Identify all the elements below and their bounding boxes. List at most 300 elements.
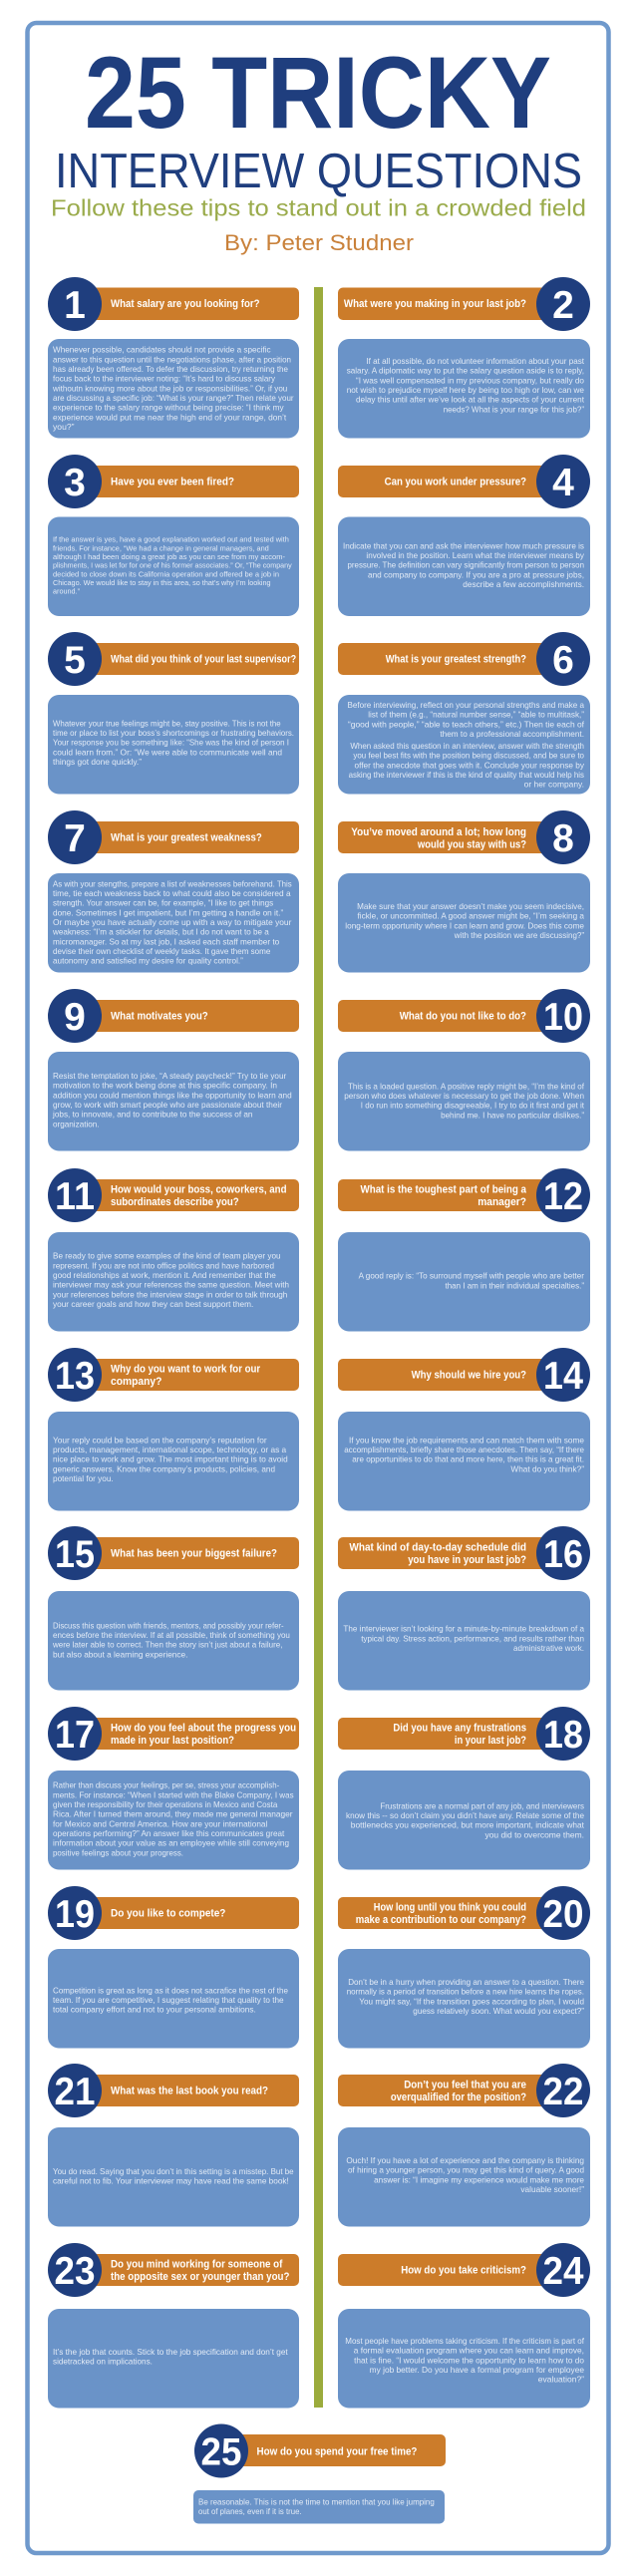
answer panel 13 (48, 1412, 299, 1511)
header bar 4 (338, 466, 563, 497)
title: 25 tricky: 25 TRICKY (85, 36, 551, 150)
question 23 (48, 2243, 299, 2409)
answer text 10: behind me. I have no particular dislikes.” (441, 1110, 584, 1120)
header bar 14 (338, 1359, 563, 1391)
answer panel 19 (48, 1949, 299, 2048)
header bar 16 (338, 1537, 563, 1569)
number badge 11: 11 (55, 1175, 95, 1218)
question text 9: What motivates you? (111, 1011, 208, 1023)
answer text 16 (343, 1624, 584, 1653)
number badge 2 (536, 277, 590, 331)
answer text 22: of hiring a younger person, you may get this kind of query. A good (348, 2165, 584, 2175)
question 1 (48, 277, 299, 439)
answer text 23: sidetracked on implications. (53, 2357, 153, 2367)
question 16 (338, 1526, 590, 1691)
answer text 14 (344, 1435, 584, 1473)
answer text 9: motivation to the work being done at this specific company. In (53, 1081, 277, 1091)
answer text 16: administrative work. (513, 1643, 584, 1653)
header bar 5 (75, 643, 299, 675)
answer text 6: list of them (e.g., “natural number sense,” “able to multitask,” (368, 710, 584, 720)
question text 4: Can you work under pressure? (385, 477, 526, 488)
question text 8: would you stay with us? (417, 838, 526, 850)
number badge 10 (536, 989, 590, 1043)
answer text 16: typical day. Stress action, performance, and results rather than (361, 1633, 584, 1643)
answer text 4: describe a few accomplishments. (463, 579, 584, 589)
answer text 24: that is fine. “I would welcome the opportunity to learn how to do (354, 2355, 584, 2365)
answer text 2: salary. A diplomatic way to put the salary question aside is to reply, (347, 366, 584, 376)
number badge 2: 2 (552, 284, 574, 327)
answer panel 24 (338, 2309, 590, 2409)
answer panel 8 (338, 873, 590, 973)
answer text 15: Discuss this question with friends, mentors, and possibly your refer- (53, 1620, 284, 1630)
answer text 1: Whenever possible, candidates should not provide a specific (53, 345, 271, 355)
question text 20 (356, 1902, 526, 1926)
number badge 4 (536, 455, 590, 508)
answer text 3: Chicago. We would like to stay in this area, so that’s why I’m looking (53, 578, 271, 587)
header bar 25 (221, 2434, 446, 2466)
answer text 7: autonomy and satisfied my desire for quality control.” (53, 956, 243, 966)
question text 25: How do you spend your free time? (257, 2446, 418, 2458)
number badge 20: 20 (542, 1893, 584, 1936)
answer text 23: It’s the job that counts. Stick to the job specification and don’t get (53, 2347, 288, 2357)
number badge 3: 3 (64, 462, 86, 504)
question 25 (193, 2424, 446, 2524)
answer text 5: Whatever your true feelings might be, stay positive. This is not the (53, 718, 281, 728)
answer text 21: careful not to fib. Your interviewer may have read the same book! (53, 2176, 289, 2186)
answer text 4: involved in the position. Learn what the interviewer means by (366, 550, 585, 560)
question text 20: How long until you think you could (374, 1902, 526, 1914)
answer text 12: than I am in their individual specialties.” (445, 1280, 584, 1290)
question text 14: Why should we hire you? (412, 1370, 526, 1382)
answer text 1: focus back to the interviewer noting: “It’s hard to discuss salary (53, 374, 276, 384)
answer text 24 (345, 2336, 585, 2385)
question text 8 (351, 826, 526, 850)
answer panel 7 (48, 873, 299, 973)
number badge 16 (536, 1526, 590, 1580)
header bar 15 (75, 1537, 299, 1569)
answer text 24: evaluation?” (538, 2375, 584, 2385)
header bar 1 (75, 287, 299, 320)
number badge 5: 5 (64, 639, 86, 682)
header bar 19 (75, 1897, 299, 1929)
number badge 10: 10 (543, 996, 583, 1039)
answer text 21: You do read. Saying that you don’t in this setting is a misstep. But be (53, 2166, 294, 2176)
number badge 25: 25 (201, 2430, 241, 2474)
header bar 24 (338, 2254, 563, 2286)
question text 11 (111, 1184, 287, 1208)
answer text 18 (346, 1800, 585, 1839)
number badge 17: 17 (55, 1714, 95, 1757)
question text 15: What has been your biggest failure? (111, 1548, 277, 1560)
answer text 24: my job better. Do you have a formal program for employee (370, 2365, 584, 2375)
answer text 14: are opportunities to do that and more here, then this is a great fit. (352, 1454, 584, 1464)
answer text 3 (53, 535, 292, 596)
answer text 10: This is a loaded question. A positive reply might be, “I’m the kind of (348, 1081, 585, 1091)
answer text 20: guess relatively soon. What would you expect?” (413, 2006, 584, 2016)
answer panel 18 (338, 1771, 590, 1870)
answer panel 17 (48, 1771, 299, 1870)
answer text 8: long-term opportunity where I can learn and grow. Does this come (345, 920, 584, 930)
answer panel 20 (338, 1949, 590, 2048)
number badge 20 (536, 1886, 590, 1940)
answer text 20: normally is a period of transition before a new hire learns the ropes. (347, 1987, 584, 1997)
question 12 (338, 1168, 590, 1332)
answer text 18: know this -- so don’t claim you didn’t have any. Relate some of the (346, 1810, 584, 1820)
answer text 10: person who does whatever is necessary to get the job done. When (344, 1091, 584, 1101)
number badge 6: 6 (552, 639, 574, 682)
number badge 23 (48, 2243, 102, 2297)
number badge 5 (48, 632, 102, 686)
answer panel 16 (338, 1591, 590, 1691)
question text 18: Did you have any frustrations (393, 1723, 526, 1735)
header bar 2 (338, 287, 563, 320)
answer text 15: but also about a learning experience. (53, 1649, 187, 1659)
question 14 (338, 1348, 590, 1511)
number badge 14 (536, 1348, 590, 1402)
answer text 2: If at all possible, do not volunteer information about your past (366, 356, 585, 366)
answer text 17: Rica. After I turned them around, they made me general manager (53, 1809, 293, 1819)
answer text 5: Your response you be something like: “She was the kind of person I (53, 738, 289, 748)
answer text 11: good relationships at work, mention it. And remember that the (53, 1270, 276, 1280)
question text 22: overqualified for the position? (391, 2092, 526, 2103)
number badge 9 (48, 989, 102, 1043)
answer text 15: were later able to correct. Then the story isn’t just about a failure, (52, 1640, 283, 1650)
answer text 6: When asked this question in an interview, answer with the strength (350, 741, 584, 751)
answer text 14: accomplishments, briefly share those anecdotes. Then say, “If there (344, 1445, 584, 1454)
number badge 1: 1 (64, 284, 86, 327)
answer text 7 (52, 878, 292, 966)
answer text 1: withoutn knowing more about the job or responsibilities.” Or, if you (52, 383, 288, 393)
answer text 22: answer is: “I imagine my experience would make me more (374, 2174, 584, 2184)
number badge 1 (48, 277, 102, 331)
answer text 19 (53, 1985, 288, 2015)
question text 11: subordinates describe you? (111, 1196, 239, 1208)
answer panel 10 (338, 1052, 590, 1150)
question text 19: Do you like to compete? (111, 1908, 226, 1920)
answer text 4: Indicate that you can and ask the interviewer how much pressure is (343, 540, 584, 550)
header bar 23 (75, 2254, 299, 2286)
question text 11: How would your boss, coworkers, and (111, 1184, 287, 1196)
header bar 11 (75, 1179, 299, 1211)
question 2 (338, 277, 590, 439)
answer text 17 (53, 1780, 294, 1857)
answer text 1: experience would put me near the high end of your range, don’t (53, 412, 287, 422)
number badge 7: 7 (64, 817, 86, 860)
answer text 1 (52, 345, 294, 432)
question text 5: What did you think of your last supervisor? (111, 654, 296, 666)
answer text 21 (53, 2166, 294, 2186)
answer text 12 (359, 1271, 584, 1290)
answer panel 1 (48, 339, 299, 439)
answer text 11 (53, 1251, 289, 1309)
answer text 23 (53, 2347, 288, 2367)
answer text 1: has already been offered. To defer the discussion, try returning the (53, 364, 288, 374)
question 21 (48, 2064, 299, 2227)
answer text 6: Before interviewing, reflect on your personal strengths and make a (347, 700, 584, 710)
question text 12 (361, 1184, 527, 1208)
number badge 8: 8 (552, 817, 574, 860)
question text 17 (111, 1723, 296, 1747)
question text 17: made in your last position? (111, 1735, 234, 1747)
answer text 19: team. If you are competitive, I suggest relating that quality to the (53, 1995, 284, 2005)
number badge 11 (48, 1168, 102, 1222)
question text 20: make a contribution to our company? (356, 1914, 526, 1926)
answer text 8: fickle, or uncommitted. A good answer might be, “I’m seeking a (357, 911, 584, 921)
question 13 (48, 1348, 299, 1511)
number badge 12 (536, 1168, 590, 1222)
answer text 10: I do run into something disagreeable, I try to do it first and get it (361, 1101, 585, 1111)
answer text 3: although I had been doing a great job as you can see from my accom- (53, 552, 286, 561)
answer text 18: bottlenecks you experienced, but more important, indicate what (351, 1820, 585, 1830)
number badge 22: 22 (542, 2071, 584, 2113)
answer text 4 (343, 540, 585, 589)
number badge 24: 24 (542, 2250, 584, 2293)
answer text 3: If the answer is yes, have a good explanation worked out and tested with (53, 535, 289, 544)
number badge 23: 23 (54, 2250, 96, 2293)
question 9 (48, 989, 299, 1150)
answer text 5 (53, 718, 294, 767)
answer text 13: Your reply could be based on the company’s reputation for (53, 1435, 267, 1445)
answer text 6: asking the interviewer if this is the kind of quality that would help his (349, 770, 584, 780)
answer text 7: devise their own checklist of weekly tasks. It gave them some (53, 946, 271, 956)
answer text 14: What do you think?” (510, 1463, 584, 1473)
question text 8: You’ve moved around a lot; how long (351, 826, 526, 838)
answer text 3: friends. For instance, “We had a change in general managers, and (53, 543, 269, 552)
answer text 6: you feel best fits with the position being discussed, and be sure to (353, 751, 584, 761)
question 24 (338, 2243, 590, 2409)
header bar 12 (338, 1179, 563, 1211)
number badge 25 (194, 2424, 248, 2478)
answer text 22 (346, 2155, 584, 2194)
question text 24: How do you take criticism? (401, 2265, 526, 2277)
question text 16 (349, 1541, 526, 1566)
question 3 (48, 455, 299, 616)
number badge 15 (48, 1526, 102, 1580)
number badge 16: 16 (543, 1533, 583, 1576)
answer text 8 (345, 901, 584, 940)
answer text 16: The interviewer isn’t looking for a minute-by-minute breakdown of a (343, 1624, 584, 1634)
answer panel 21 (48, 2127, 299, 2227)
answer text 1: are discussing a specific job: “What is your range?” Then relate your (53, 393, 294, 403)
answer panel 15 (48, 1591, 299, 1691)
answer text 5: things got done quickly.” (53, 757, 142, 767)
answer text 25: out of planes, even if it is true. (198, 2506, 302, 2516)
answer text 7: As with your stengths, prepare a list of weaknesses beforehand. This (53, 878, 292, 888)
header bar 9 (75, 1000, 299, 1032)
answer text 9: addition you could mention things like the opportunity to learn and (53, 1090, 292, 1100)
header (51, 36, 586, 255)
answer text 11: interviewer may ask your references the same question. Meet with (53, 1280, 289, 1290)
answer text 2 (347, 356, 585, 414)
header bar 6 (338, 643, 563, 675)
question 10 (338, 989, 590, 1150)
answer text 2: delay this until after we’ve look at all the aspects of your current (356, 395, 585, 405)
question text 18: in your last job? (455, 1735, 526, 1747)
answer text 17: ments. For instance: “When I started with the Blake Company, I was (53, 1789, 294, 1799)
answer text 9: jobs, to innovate, and to contribute to the success of an (52, 1110, 253, 1120)
number badge 17 (48, 1707, 102, 1761)
answer text 5: could learn from.” Or: “We were able to communicate well and (53, 747, 282, 757)
center divider line (314, 287, 323, 2408)
answer text 24: a formal evaluation program where you can learn and improve, (354, 2346, 584, 2356)
question text 12: What is the toughest part of being a (361, 1184, 527, 1196)
answer panel 11 (48, 1232, 299, 1332)
answer text 15: ences before the interview. If at all possible, think of something you (53, 1630, 290, 1640)
answer text 3: plishments, I was let for for one of his former associates.” Or, “The company (53, 561, 292, 570)
answer text 11: represent. If you are not into office politics and have harbored (53, 1260, 274, 1270)
number badge 21 (48, 2064, 102, 2117)
number badge 15: 15 (55, 1533, 95, 1576)
answer text 1: experience to the salary range without being precise: “I think my (53, 403, 284, 413)
number badge 19: 19 (55, 1893, 95, 1936)
header bar 22 (338, 2075, 563, 2106)
number badge 18 (536, 1707, 590, 1761)
answer text 15 (52, 1620, 290, 1659)
question 22 (338, 2064, 590, 2227)
answer panel 14 (338, 1412, 590, 1511)
question 20 (338, 1886, 590, 2048)
question text 22 (391, 2080, 526, 2103)
question text 23 (111, 2259, 290, 2283)
question text 2: What were you making in your last job? (344, 298, 526, 310)
answer text 17: Rather than discuss your feelings, per se, stress your accomplish- (53, 1780, 279, 1790)
answer text 19: Competition is great as long as it does not sacrafice the rest of the (53, 1985, 288, 1995)
question text 6: What is your greatest strength? (386, 654, 526, 666)
answer text 2: not wish to prejudice myself here by being too high or low, can we (347, 385, 584, 395)
question 8 (338, 810, 590, 973)
header bar 17 (75, 1718, 299, 1750)
question text 18 (393, 1723, 526, 1747)
number badge 8 (536, 810, 590, 864)
number badge 3 (48, 455, 102, 508)
answer text 9 (52, 1071, 292, 1128)
question 15 (48, 1526, 299, 1691)
question text 17: How do you feel about the progress you (111, 1723, 296, 1735)
answer text 13: generic answers. Know the company’s products, policies, and (53, 1463, 275, 1473)
answer text 11: your references before the interview stage in order to talk through (53, 1289, 288, 1299)
answer text 8: with the position we are discussing?” (454, 930, 584, 940)
answer text 25: Be reasonable. This is not the time to mention that you like jumping (198, 2496, 435, 2506)
number badge 12: 12 (543, 1175, 583, 1218)
answer text 13 (53, 1435, 288, 1483)
byline: By: Peter Studner (224, 230, 414, 255)
answer panel 25 (193, 2490, 445, 2524)
number badge 24 (536, 2243, 590, 2297)
question 7 (48, 810, 299, 973)
number badge 6 (536, 632, 590, 686)
answer panel 23 (48, 2309, 299, 2409)
question text 1: What salary are you looking for? (111, 298, 260, 310)
question text 3: Have you ever been fired? (111, 477, 234, 488)
number badge 13: 13 (55, 1355, 95, 1398)
answer text 5: time or place to list your boss’s shortcomings or frustrating behaviors. (53, 728, 294, 738)
number badge 18: 18 (543, 1714, 583, 1757)
number badge 14: 14 (543, 1355, 583, 1398)
answer text 24: Most people have problems taking criticism. If the criticism is part of (345, 2336, 585, 2346)
answer text 13: potential for you. (53, 1473, 114, 1483)
answer panel 5 (48, 695, 299, 794)
question 11 (48, 1168, 299, 1332)
question 19 (48, 1886, 299, 2048)
header bar 20 (338, 1897, 563, 1929)
answer text 14: If you know the job requirements and can match them with some (349, 1435, 584, 1445)
answer text 10 (344, 1081, 585, 1120)
answer text 18: Frustrations are a normal part of any job, and interviewers (380, 1800, 584, 1810)
number badge 19 (48, 1886, 102, 1940)
question text 12: manager? (477, 1196, 526, 1208)
question 5 (48, 632, 299, 794)
question text 16: you have in your last job? (408, 1554, 526, 1566)
answer panel 3 (48, 516, 299, 616)
number badge 13 (48, 1348, 102, 1402)
subtitle: Follow these tips to stand out in a crowded field (51, 195, 586, 221)
answer text 2: “I was well compensated in my previous company, but really do (356, 375, 584, 385)
question text 23: the opposite sex or younger than you? (111, 2271, 290, 2283)
number badge 4: 4 (552, 462, 574, 504)
answer text 18: you did to overcome them. (484, 1829, 584, 1839)
answer text 9: grow, to work with smart people who are passionate about their (53, 1100, 282, 1110)
question text 16: What kind of day-to-day schedule did (349, 1541, 526, 1553)
question 4 (338, 455, 590, 616)
answer text 20: Don’t be in a hurry when providing an answer to a question. There (348, 1977, 584, 1987)
answer text 9: organization. (53, 1119, 100, 1128)
header bar 21 (75, 2075, 299, 2106)
question text 23: Do you mind working for someone of (111, 2259, 283, 2271)
answer text 20 (347, 1977, 584, 2016)
answer text 7: micromanager. So at my last job, I asked each staff member to (53, 936, 280, 946)
answer text 8: Make sure that your answer doesn’t make you seem indecisive, (357, 901, 584, 911)
answer text 7: done. Sometimes I get impatient, but I’m getting a handle on it.” (53, 907, 283, 917)
answer text 6: or her company. (524, 780, 584, 790)
answer text 11: Be ready to give some examples of the kind of team player you (53, 1251, 281, 1261)
number badge 7 (48, 810, 102, 864)
title: interview questions: INTERVIEW QUESTIONS (55, 145, 582, 198)
answer text 17: information about your value as an employee while still conveying (53, 1838, 289, 1848)
question text 13 (111, 1364, 261, 1388)
answer panel 22 (338, 2127, 590, 2227)
question text 22: Don’t you feel that you are (404, 2080, 526, 2092)
answer text 25 (198, 2496, 435, 2516)
header bar 13 (75, 1359, 299, 1391)
question text 10: What do you not like to do? (400, 1011, 526, 1023)
answer text 22: valuable sooner!” (520, 2184, 584, 2194)
answer text 20: You might say, “If the transition goes according to plan, I would (359, 1996, 584, 2006)
answer text 6: “good with people,” “able to teach others,” etc.) Then tie each of (348, 719, 585, 729)
answer text 7: weakness: “I’m a stickler for details, but I do not want to be a (52, 927, 269, 937)
answer text 6: them to a professional accomplishment. (440, 729, 584, 739)
answer text 3: around.” (53, 587, 80, 596)
answer text 13: nice place to work and grow. The most important thing is to avoid (53, 1454, 288, 1464)
number badge 22 (536, 2064, 590, 2117)
answer panel 12 (338, 1232, 590, 1332)
question 18 (338, 1707, 590, 1870)
question text 13: company? (111, 1376, 162, 1388)
answer panel 9 (48, 1052, 299, 1150)
number badge 9: 9 (64, 996, 86, 1039)
header bar 8 (338, 821, 563, 853)
question text 7: What is your greatest weakness? (111, 832, 262, 844)
answer text 9: Resist the temptation to joke, “A steady paycheck!” Try to tie your (53, 1071, 286, 1081)
number badge 21: 21 (54, 2071, 96, 2113)
answer text 17: for Mexico and Central America. How are your international (53, 1818, 267, 1828)
answer text 11: your career goals and how they can best support them. (53, 1299, 253, 1309)
answer text 22: Ouch! If you have a lot of experience and the company is thinking (346, 2155, 584, 2165)
answer text 12: A good reply is: “To surround myself with people who are better (359, 1271, 584, 1281)
question 6 (338, 632, 590, 794)
answer text 7: strength. Your answer can be, for example, “I like to get things (53, 898, 273, 908)
header bar 3 (75, 466, 299, 497)
answer panel 2 (338, 339, 590, 439)
